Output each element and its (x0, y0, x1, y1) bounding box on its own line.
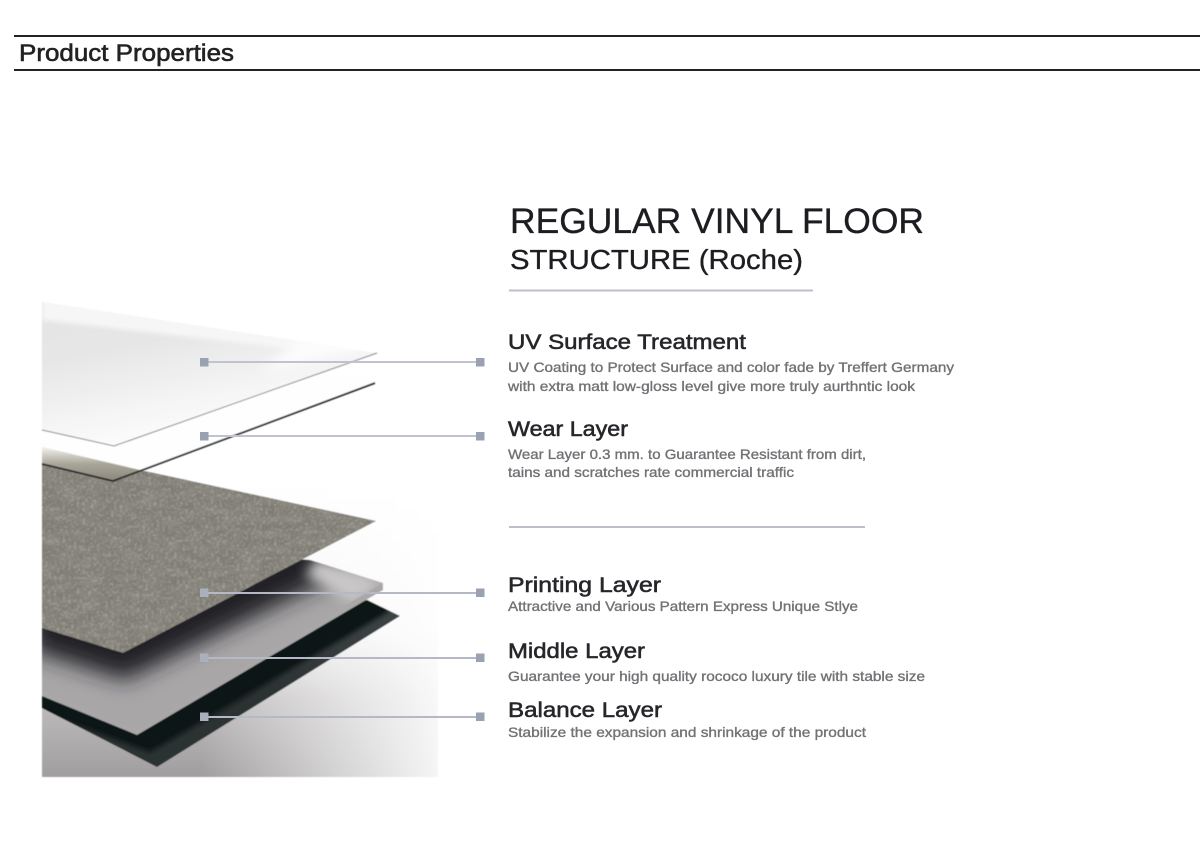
connector: UV Surface Treatment (200, 358, 484, 366)
connector: Wear Layer (200, 432, 484, 440)
text block: Printing Layer (508, 574, 858, 614)
text block: Wear Layer: Wear Layer (508, 418, 628, 441)
text block: Middle Layer (508, 640, 925, 684)
connector: Printing Layer (200, 588, 484, 597)
balance layer sheet (41, 599, 400, 768)
text block: Middle Layer: Guarantee your high quality rococo luxury tile with stable size (508, 668, 925, 684)
text block: Balance Layer (508, 699, 866, 740)
text block: Wear Layer (508, 418, 866, 480)
text block: Printing Layer: Attractive and Various Pattern Express Unique Stlye (508, 598, 858, 614)
connector: Middle Layer (200, 654, 484, 662)
UV surface film sheet (42, 298, 390, 446)
main title: REGULAR VINYL FLOOR (510, 202, 924, 241)
text block: UV Surface Treatment: UV Coating to Protect Surface and color fade by Treffert Germany (508, 359, 954, 375)
text block: Middle Layer: Middle Layer (508, 640, 645, 663)
main title: STRUCTURE (Roche) (510, 244, 803, 275)
text block: Wear Layer: Wear Layer 0.3 mm. to Guarantee Resistant from dirt, (508, 446, 866, 462)
middle layer sheet (41, 558, 384, 736)
heading: Product Properties: Product Properties (19, 40, 234, 67)
text block: UV Surface Treatment (507, 331, 954, 394)
main title (510, 202, 924, 275)
illustration backdrop (42, 480, 438, 777)
text block: UV Surface Treatment: with extra matt low-gloss level give more truly aurthntic look (507, 378, 916, 394)
wear layer sheet (42, 375, 375, 481)
text block: Wear Layer: tains and scratches rate commercial traffic (508, 464, 794, 480)
text block: Balance Layer: Stabilize the expansion and shrinkage of the product (508, 724, 866, 740)
text block: Balance Layer: Balance Layer (508, 699, 662, 722)
floor layers illustration (30, 298, 438, 777)
text block: UV Surface Treatment: UV Surface Treatment (508, 331, 746, 354)
text block: Printing Layer: Printing Layer (508, 574, 661, 597)
printing layer stone sheet (42, 447, 378, 655)
connector: Balance Layer (200, 712, 484, 721)
